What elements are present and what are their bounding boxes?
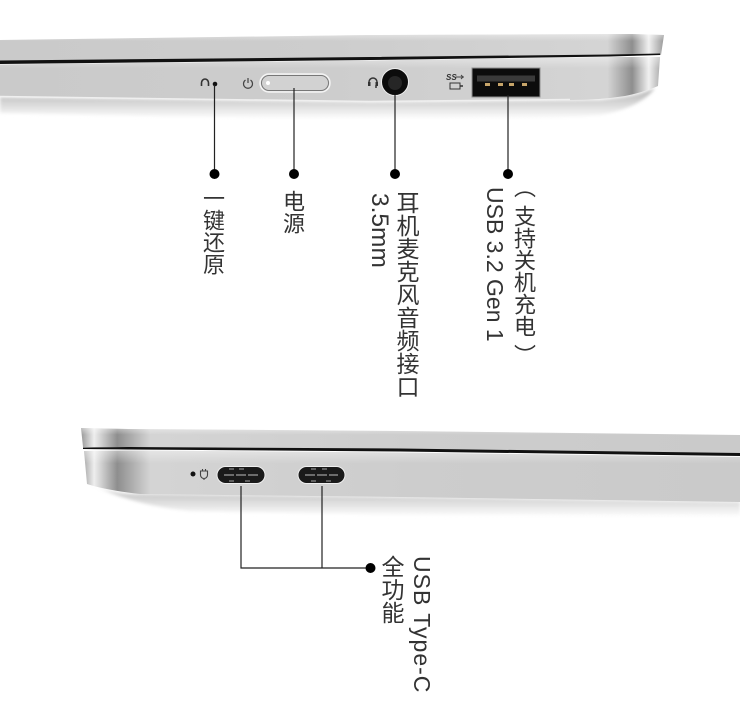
shadow xyxy=(0,88,655,119)
leader lines and dots xyxy=(210,85,513,573)
label: 3.5mm: 3.5mm xyxy=(366,193,393,268)
label: restore: 一键还原 xyxy=(200,187,225,275)
usb-c port 2 xyxy=(298,466,345,484)
label: usb charging note: （ 支持关机充电 ） xyxy=(511,176,536,366)
status led xyxy=(190,472,196,476)
power button xyxy=(260,74,330,92)
base xyxy=(84,450,740,502)
hinge gap xyxy=(0,54,660,64)
usb port xyxy=(472,68,540,97)
lid xyxy=(0,34,664,62)
icon: charge xyxy=(200,469,208,480)
top laptop xyxy=(0,34,664,119)
hinge gap xyxy=(83,447,740,456)
label: usb type-c: USB Type-C xyxy=(409,556,435,693)
icon: superspeed usb xyxy=(446,73,464,89)
label: usb 3.2: USB 3.2 Gen 1 xyxy=(482,187,508,342)
icon: power xyxy=(244,78,253,88)
label: full function: 全功能 xyxy=(378,555,404,624)
label: power: 电源 xyxy=(280,190,305,234)
label: audio jack: 耳机麦克风音频接口 xyxy=(393,191,419,398)
audio jack xyxy=(382,68,408,96)
usb-c port 1 xyxy=(217,466,265,484)
icon: restore xyxy=(202,79,208,86)
shadow xyxy=(90,483,740,517)
icon: superspeed usb: SS xyxy=(446,73,457,82)
lid xyxy=(81,428,740,455)
bottom laptop xyxy=(81,428,740,517)
icon: headset xyxy=(368,78,378,88)
base xyxy=(0,57,660,102)
restore pinhole xyxy=(213,82,217,86)
